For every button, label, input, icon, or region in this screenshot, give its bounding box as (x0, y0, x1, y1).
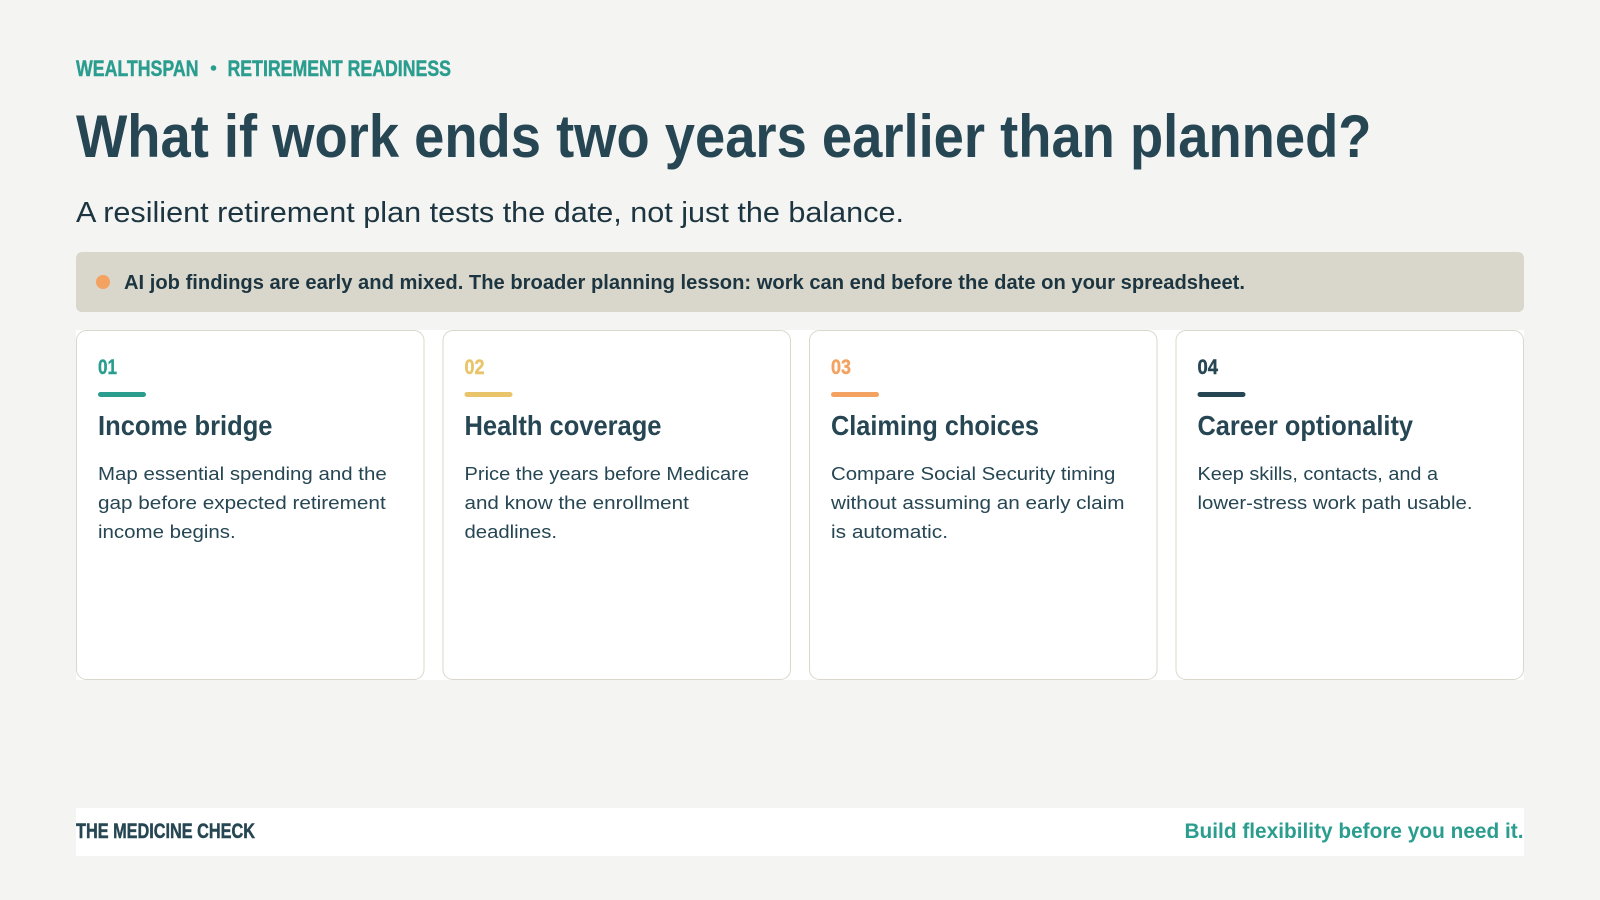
number 02: 02 (464, 356, 484, 379)
card body: deadlines. (464, 521, 557, 542)
card heading: Income bridge (98, 410, 272, 441)
title: What if work ends two years earlier than planned? (76, 103, 1372, 170)
number 01: 01 (98, 356, 117, 379)
header eyebrow (76, 56, 451, 81)
card body (98, 463, 387, 542)
number 03: 03 (831, 356, 851, 379)
card heading: Career optionality (1198, 410, 1413, 441)
panel: claiming choices (810, 330, 1157, 680)
card body: Price the years before Medicare (464, 463, 749, 484)
card body (464, 463, 749, 542)
callout text: AI job findings are early and mixed. The broader planning lesson: work can end before the date on your spreadsheet. (124, 272, 1245, 294)
card row (76, 330, 1524, 680)
panel: income bridge (76, 330, 424, 680)
card body (830, 463, 1124, 542)
card body: is automatic. (831, 521, 948, 542)
card body: lower-stress work path usable. (1198, 492, 1472, 513)
card heading: Health coverage (464, 410, 662, 441)
panel: health coverage (443, 330, 790, 680)
card body: Map essential spending and the (98, 463, 387, 484)
subtitle: A resilient retirement plan tests the date, not just the balance. (76, 197, 904, 229)
card heading: Claiming choices (831, 410, 1039, 441)
card body: without assuming an early claim (830, 492, 1124, 513)
accent bar (98, 392, 146, 397)
card body: income begins. (98, 521, 236, 542)
card body: and know the enrollment (464, 492, 689, 513)
callout banner (76, 252, 1524, 312)
accent bar (464, 392, 512, 397)
accent bar (1198, 392, 1246, 397)
accent bar (831, 392, 879, 397)
icon: orange dot (96, 275, 110, 289)
card body: Compare Social Security timing (831, 463, 1115, 484)
header eyebrow: WEALTHSPAN (76, 56, 198, 81)
header eyebrow: RETIREMENT READINESS (228, 56, 451, 81)
footer strip (76, 808, 1524, 856)
card body (1198, 463, 1472, 513)
footer label: THE MEDICINE CHECK (76, 820, 255, 843)
card body: gap before expected retirement (98, 492, 386, 513)
panel: career optionality (1176, 330, 1524, 680)
card body: Keep skills, contacts, and a (1198, 463, 1439, 484)
footer tagline: Build flexibility before you need it. (1184, 820, 1524, 843)
number 04: 04 (1198, 356, 1218, 379)
